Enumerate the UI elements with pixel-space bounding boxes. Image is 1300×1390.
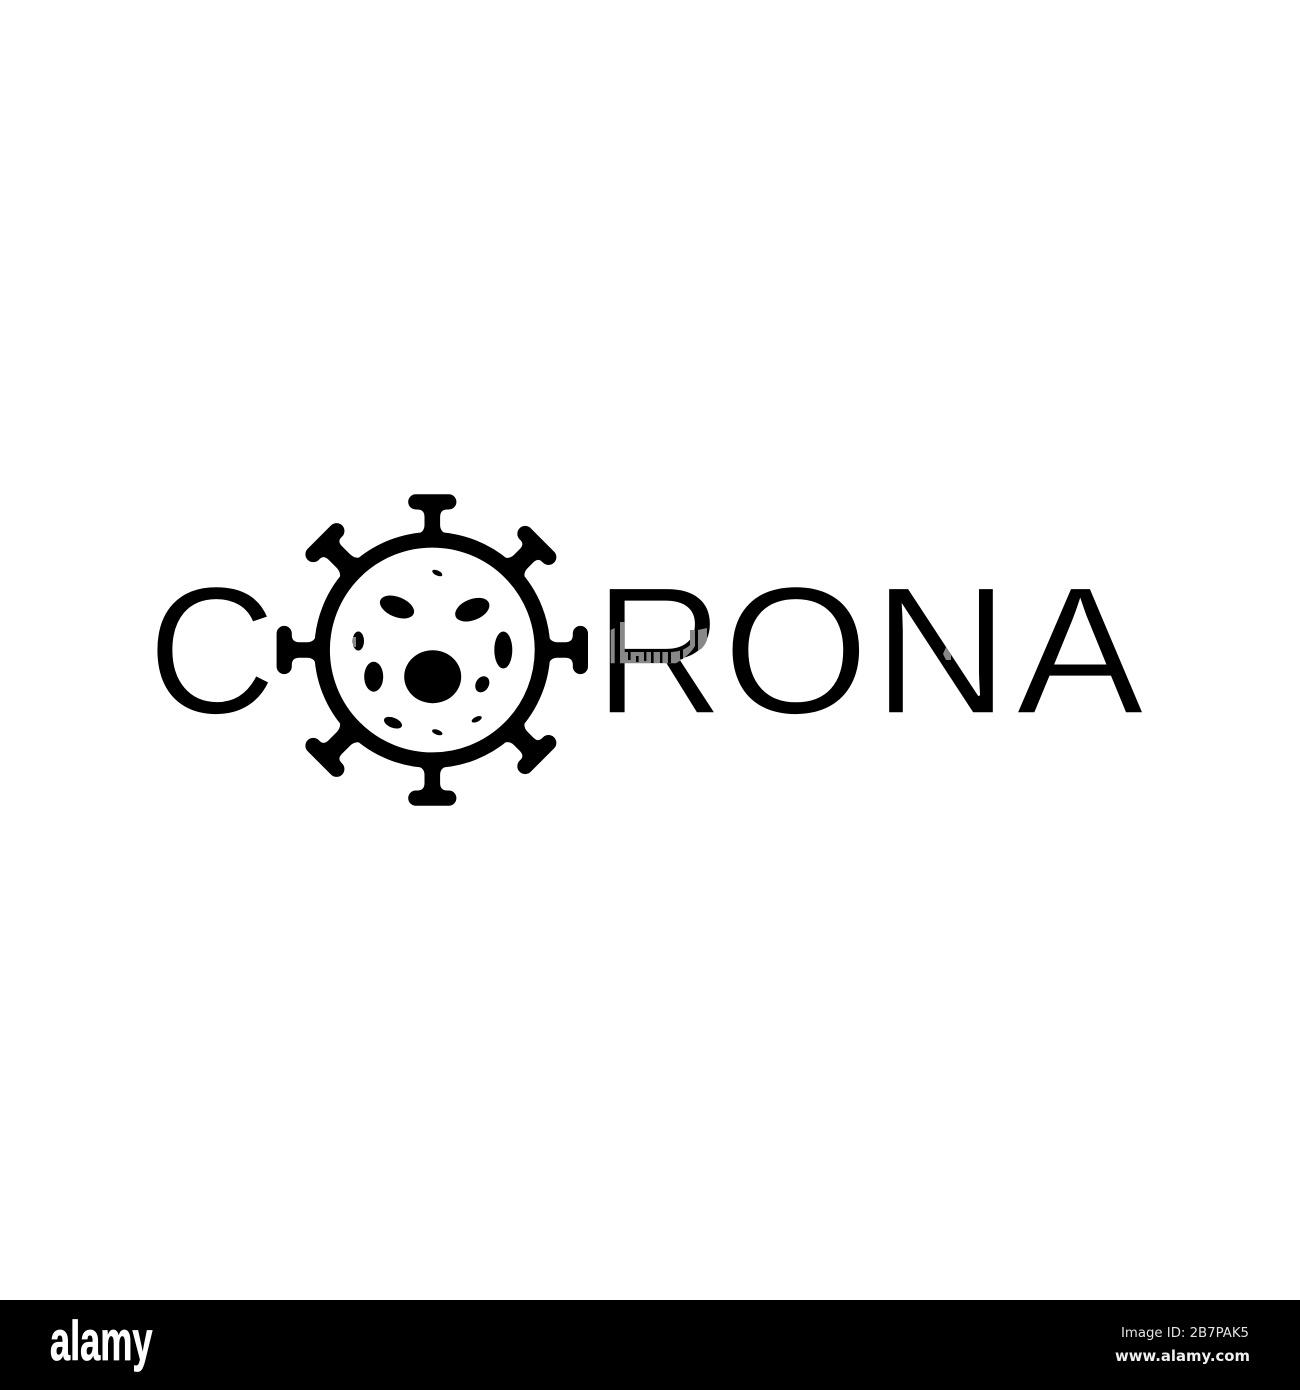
letter R: R — [594, 549, 724, 752]
letter N: N — [873, 550, 1009, 753]
icon: virus — [277, 494, 588, 806]
letter O: O — [723, 549, 869, 753]
watermark traces on letters — [611, 622, 951, 663]
virus interior spots and nucleus — [353, 568, 512, 737]
footer bar — [0, 1300, 1300, 1390]
logo: CORONA wordmark with virus as the O — [147, 494, 1144, 806]
footer logo: alamy: alamy — [50, 1309, 152, 1372]
letter C: C — [147, 550, 276, 753]
image id: Image ID: 2B7PAK5 — [1121, 1325, 1249, 1341]
virus spikes — [277, 494, 588, 806]
virus ring — [322, 540, 542, 760]
website: www.alamy.com — [1115, 1347, 1250, 1365]
letter A: A — [1016, 549, 1144, 752]
